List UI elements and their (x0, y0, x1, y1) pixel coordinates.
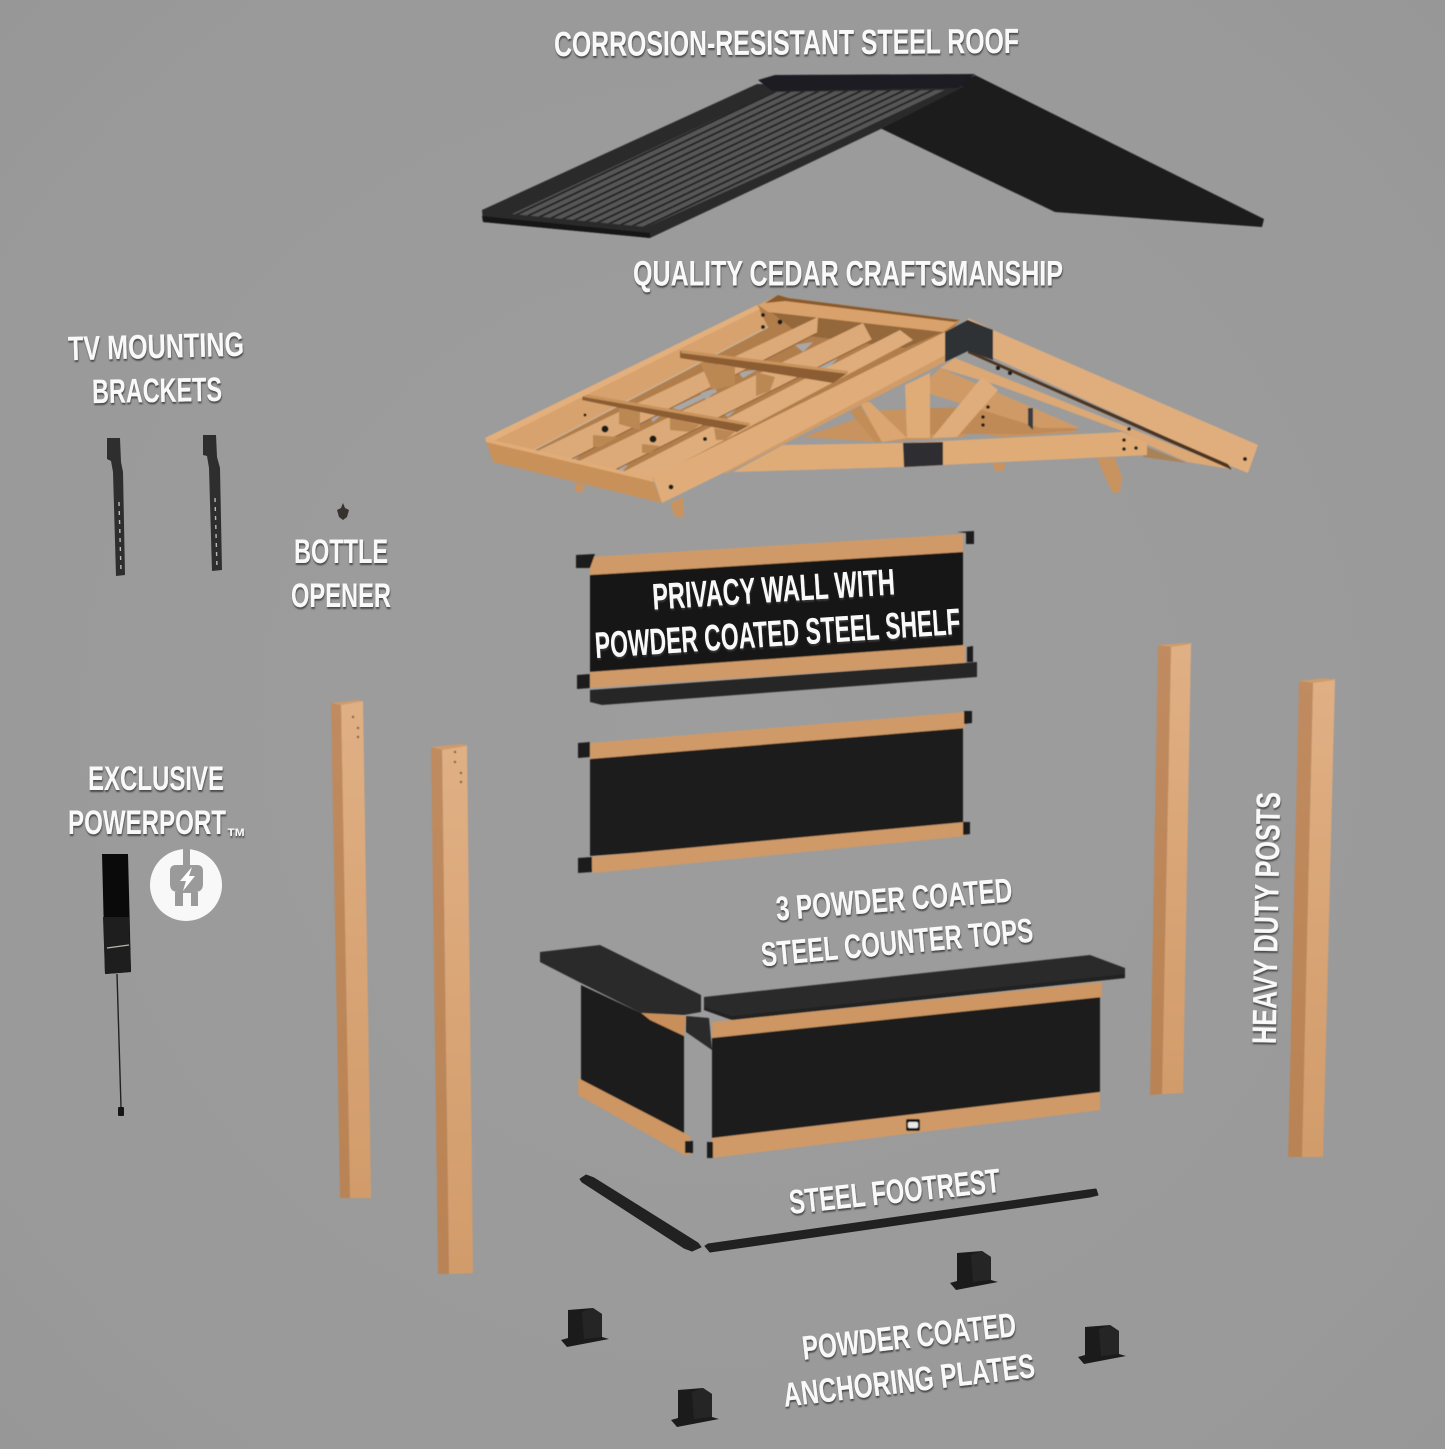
king post and webs (905, 373, 930, 438)
label: brackets: BRACKETS (92, 371, 222, 411)
steel plate (903, 442, 943, 467)
post far right (1288, 678, 1335, 1157)
icon: bottle opener (337, 503, 349, 520)
label: heavy duty posts: HEAVY DUTY POSTS (1246, 792, 1288, 1044)
plate A (561, 1308, 609, 1347)
counter right upper beam (712, 982, 1102, 1038)
label: bottle: BOTTLE (294, 533, 388, 571)
label: privacy wall line 2: POWDER COATED STEEL SHELF (594, 601, 961, 666)
counter right lower beam (712, 1092, 1100, 1158)
front beam (485, 438, 662, 503)
counter feet (685, 1141, 693, 1153)
counter power outlet (906, 1119, 920, 1131)
label: anchoring line 1: POWDER COATED (800, 1306, 1018, 1368)
roof ridge cap (758, 74, 975, 91)
label: powerport: POWERPORT (68, 804, 226, 842)
counter left top (540, 945, 701, 1015)
roof frame deck base (485, 305, 960, 480)
label: counter tops line 2: STEEL COUNTER TOPS (759, 912, 1035, 974)
side strip (485, 305, 768, 452)
back truss (802, 408, 1080, 442)
label: exclusive: EXCLUSIVE (88, 760, 224, 798)
label: footrest: STEEL FOOTREST (787, 1162, 1002, 1222)
label: anchoring line 2: ANCHORING PLATES (781, 1347, 1037, 1415)
label: cedar: QUALITY CEDAR CRAFTSMANSHIP (633, 254, 1063, 294)
anchoring plates (561, 1251, 1126, 1427)
steel footrest (580, 1175, 1098, 1252)
back beam (758, 295, 960, 332)
wall panel (590, 551, 963, 673)
wall brackets (576, 531, 974, 689)
label: trademark: TM (228, 827, 244, 839)
footrest left bar (580, 1175, 701, 1251)
post back right (1150, 643, 1191, 1095)
lower wall brackets (578, 711, 972, 873)
PowerPort unit (102, 854, 131, 1116)
label: privacy wall line 1: PRIVACY WALL WITH (651, 561, 896, 618)
counter left lower beam (578, 1078, 690, 1155)
steel strap (1028, 408, 1033, 430)
post front left (331, 700, 371, 1198)
wall top beam (590, 534, 963, 575)
tie beam (733, 432, 1147, 472)
lower wall fill (590, 728, 963, 856)
roof (482, 74, 1264, 238)
counter (540, 945, 1125, 1158)
counter connector (686, 1016, 712, 1050)
roof eave trim (482, 216, 650, 238)
roof ribbed panel (512, 90, 945, 227)
footrest right bar (705, 1189, 1098, 1252)
icon: power plug (150, 848, 222, 921)
TV mounting brackets (107, 435, 222, 576)
cedar roof frame (485, 295, 1258, 517)
side rafter lip (485, 305, 760, 443)
near rafter (653, 332, 945, 503)
counter right top (704, 955, 1125, 1020)
plate B (671, 1388, 719, 1427)
lower chord (930, 368, 1080, 428)
post front centre (431, 744, 473, 1274)
counter left upper beam (640, 1012, 686, 1036)
roof underside (880, 75, 1264, 227)
label: TV mounting: TV MOUNTING (68, 326, 244, 368)
lower wall top beam (590, 712, 965, 759)
joists (530, 317, 913, 478)
posts (331, 643, 1335, 1274)
unit body (102, 854, 131, 974)
deck rear shadow (771, 312, 943, 348)
bracket right (203, 435, 222, 571)
plate C (950, 1251, 998, 1290)
lower wall panel (578, 711, 972, 873)
plate D (1078, 1325, 1126, 1364)
roof panel rim (482, 84, 965, 238)
deck gaps (570, 342, 838, 472)
privacy wall with shelf (576, 531, 977, 705)
label: roof: CORROSION-RESISTANT STEEL ROOF (554, 22, 1019, 64)
frame feet (575, 458, 1122, 517)
counter left panel (581, 985, 684, 1137)
bolt holes (584, 313, 1247, 489)
upper chord (940, 358, 1235, 470)
label: counter tops line 1: 3 POWDER COATED (774, 872, 1014, 928)
purlins (582, 395, 750, 432)
cross blocks (593, 362, 775, 453)
far rafter (968, 318, 1258, 473)
steel shelf (590, 662, 977, 705)
counter right panel (712, 995, 1100, 1140)
ridge gusset (945, 320, 993, 362)
unit cord (117, 974, 121, 1107)
wall bottom beam (590, 645, 965, 688)
lower wall bottom beam (590, 822, 965, 873)
label: opener: OPENER (291, 577, 391, 615)
bracket left (107, 438, 125, 576)
